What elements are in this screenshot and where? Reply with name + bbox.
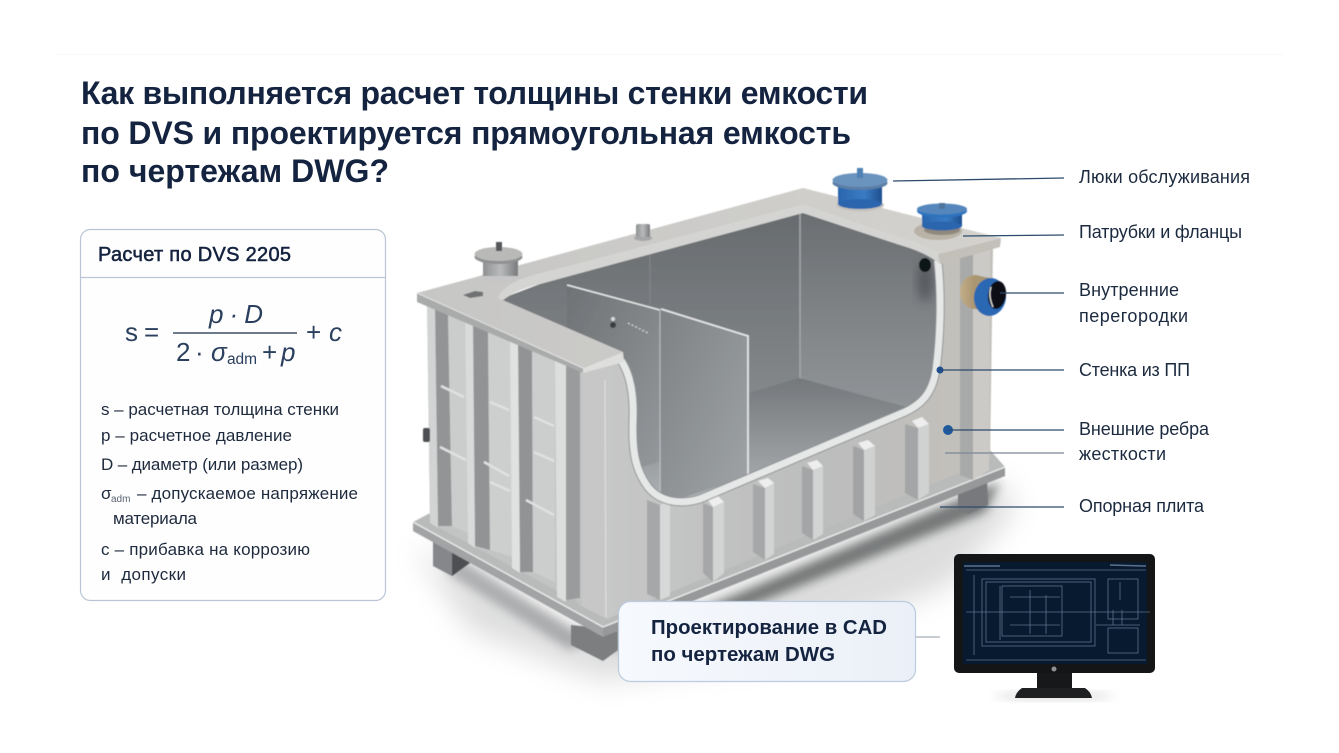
formula: =	[144, 317, 159, 347]
panel heading: Расчет по DVS 2205	[98, 244, 291, 266]
callout connector	[915, 636, 940, 638]
rim side faces	[417, 238, 1001, 373]
formula legend: – допускаемое напряжение	[137, 484, 358, 503]
formula legend	[101, 400, 358, 584]
horizontal stiffeners	[440, 386, 554, 515]
label: manholes: Люки обслуживания	[1079, 167, 1250, 187]
title: Как выполняется расчет толщины стенки емкости	[81, 75, 868, 111]
manhole: grey	[474, 242, 522, 283]
title: по чертежам DWG?	[81, 153, 389, 189]
label: base plate: Опорная плита	[1079, 496, 1205, 516]
label: internal partitions: перегородки	[1079, 306, 1188, 326]
label: nozzles and flanges: Патрубки и фланцы	[1079, 222, 1242, 242]
floor	[620, 378, 925, 510]
formula: σ	[211, 337, 228, 367]
formula legend: и допуски	[101, 565, 186, 584]
tank illustration	[413, 168, 1008, 661]
formula legend: adm	[111, 494, 130, 505]
manhole: small blue	[914, 203, 967, 240]
manhole: large blue	[832, 168, 888, 212]
formula: s	[125, 317, 138, 347]
left wall panels and ribs	[427, 304, 580, 602]
formula: adm	[227, 351, 257, 368]
label: PP wall: Стенка из ПП	[1079, 360, 1190, 380]
title	[81, 75, 868, 189]
formula legend: D – диаметр (или размер)	[101, 455, 303, 474]
label: PP wall	[936, 360, 1190, 380]
label: external stiffening ribs: жесткости	[1079, 444, 1166, 464]
callout: CAD: Проектирование в CAD	[651, 617, 887, 639]
interior smudge	[917, 258, 933, 302]
small rim bolts	[463, 291, 483, 298]
panel: DVS 2205 calculation	[80, 230, 386, 600]
small fitting	[634, 224, 652, 241]
ground shadow	[415, 480, 1015, 680]
formula legend: материала	[113, 509, 198, 528]
formula: p	[280, 337, 295, 367]
cut edge of polypropylene wall	[622, 262, 940, 502]
formula legend: σ	[101, 484, 112, 503]
side nozzle	[960, 275, 1008, 318]
front wall	[578, 248, 993, 619]
formula: p · D	[208, 299, 263, 329]
title: по DVS и проектируется прямоугольная емкость	[81, 115, 851, 151]
formula legend: p – расчетное давление	[101, 426, 292, 445]
formula: +	[306, 317, 321, 347]
label: internal partitions	[1000, 280, 1188, 326]
interior back walls	[498, 212, 940, 430]
label: internal partitions: Внутренние	[1079, 280, 1179, 300]
formula: c	[329, 317, 342, 347]
formula legend: s – расчетная толщина стенки	[101, 400, 339, 419]
internal partitions	[567, 285, 748, 505]
formula	[125, 299, 342, 368]
label: external stiffening ribs	[943, 419, 1210, 464]
callout: CAD: по чертежам DWG	[651, 644, 835, 666]
blueprint drawing	[964, 565, 1150, 660]
front wall ribs	[647, 417, 929, 600]
base plate	[413, 450, 1005, 637]
formula: ·	[195, 337, 204, 367]
rim inner lip	[498, 205, 940, 301]
left wall	[427, 302, 582, 604]
end rib	[960, 250, 990, 480]
formula: 2	[176, 337, 190, 367]
top rim	[417, 188, 1001, 368]
formula legend: c – прибавка на коррозию	[101, 540, 310, 559]
callout: CAD	[618, 602, 916, 682]
formula: +	[262, 337, 277, 367]
side bolt	[423, 428, 430, 442]
label: manholes	[893, 167, 1250, 187]
support feet	[433, 478, 988, 661]
icon: CAD monitor	[954, 554, 1155, 700]
label: external stiffening ribs: Внешние ребра	[1079, 419, 1210, 439]
